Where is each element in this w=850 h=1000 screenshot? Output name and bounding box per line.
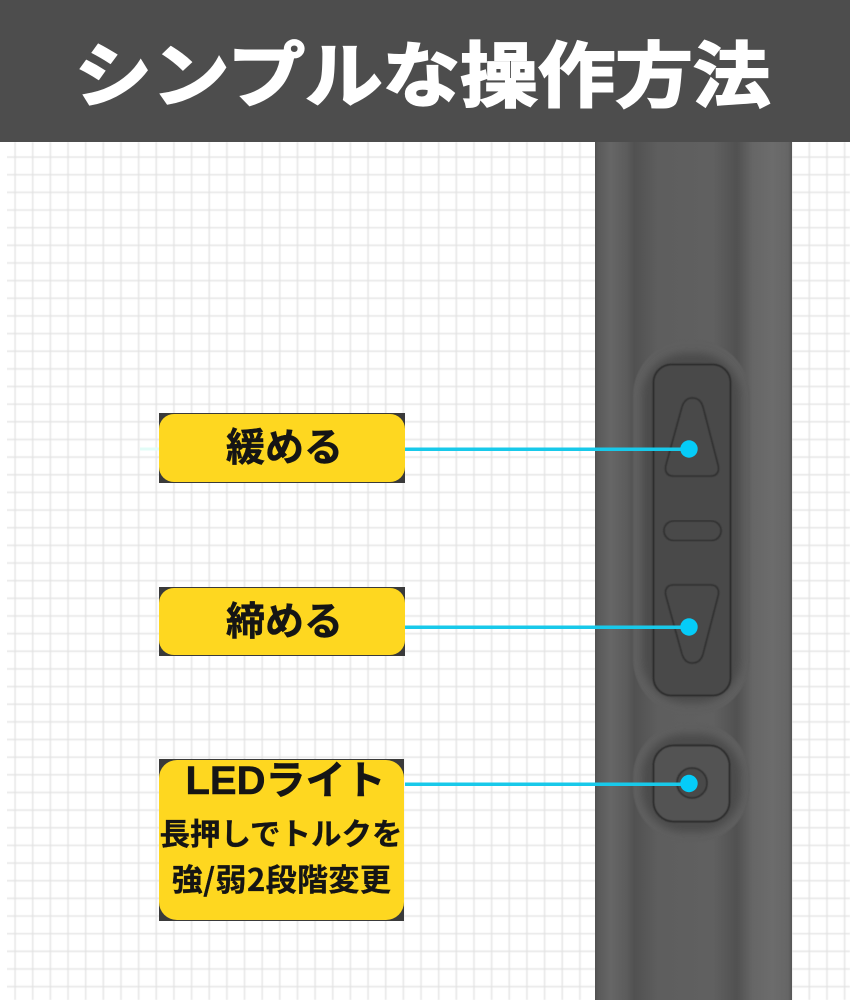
tool handle xyxy=(595,142,792,1000)
button housing: LED xyxy=(633,723,750,842)
label: LED light xyxy=(159,759,404,921)
button housing: adjust xyxy=(633,340,750,715)
button panel xyxy=(654,364,730,696)
connector: tighten xyxy=(405,618,698,636)
icon: LED ring xyxy=(677,768,707,798)
connector: LED xyxy=(405,775,698,792)
label: tighten xyxy=(159,587,405,656)
icon: down triangle button xyxy=(665,585,719,663)
title banner xyxy=(0,0,850,142)
icon: up triangle button xyxy=(665,398,719,476)
icon: centre indicator xyxy=(664,521,721,540)
label: LED light: 長押しでトルクを xyxy=(159,818,403,852)
label: LED light: LEDライト xyxy=(186,759,386,803)
connector: loosen xyxy=(140,440,698,458)
LED panel xyxy=(654,746,730,822)
label: LED light: 強/弱2段階変更 xyxy=(172,855,391,900)
label: loosen: 緩める xyxy=(226,427,343,470)
label: tighten: 締める xyxy=(226,601,343,644)
title: シンプルな操作方法 xyxy=(75,37,770,116)
label: loosen xyxy=(159,413,405,483)
